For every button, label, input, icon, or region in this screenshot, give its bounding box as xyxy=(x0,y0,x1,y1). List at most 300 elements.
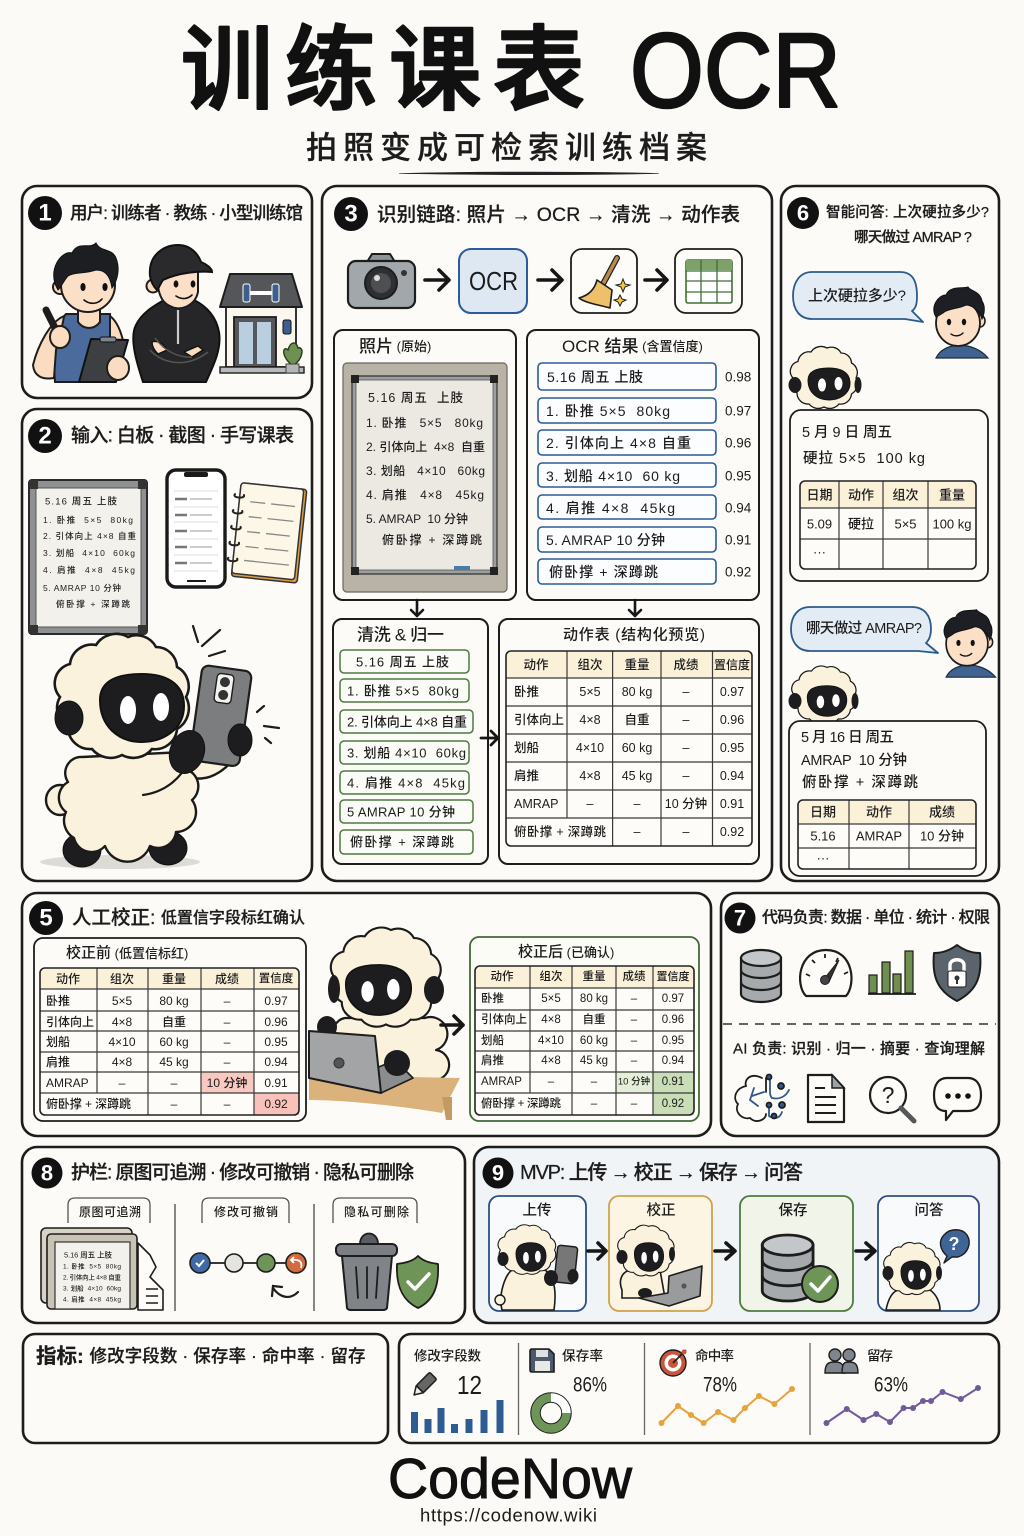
after table: 引体向上 xyxy=(481,1012,527,1026)
arrow xyxy=(715,1243,735,1259)
badge 7: 7 xyxy=(734,906,746,930)
speech bubble 1: 上次硬拉多少? xyxy=(808,286,906,304)
clean row text: 5 AMRAP 10 分钟 xyxy=(347,804,455,820)
before table: 4×8 xyxy=(112,1015,133,1029)
OCR results title: OCR 结果 (含置信度) xyxy=(562,336,703,356)
answer table 1: 重量 xyxy=(939,488,965,502)
before table: 0.94 xyxy=(264,1055,288,1069)
badge 3: 3 xyxy=(344,200,358,228)
after table: 卧推 xyxy=(481,991,504,1005)
dashed divider xyxy=(723,1023,996,1025)
heading 6: 智能问答: 上次硬拉多少? xyxy=(826,203,989,221)
after table: 4×10 xyxy=(538,1035,564,1047)
clean title: 清洗 & 归一 xyxy=(357,626,444,644)
after table: – xyxy=(548,1076,555,1088)
box: broom xyxy=(571,249,637,313)
OCR row text: 3. 划船 4×10 60 kg xyxy=(546,468,680,484)
after table: 5×5 xyxy=(541,993,561,1005)
AI heading: AI 负责: 识别 · 归一 · 摘要 · 查询理解 xyxy=(733,1040,985,1058)
answer table 1: 5.09 xyxy=(807,516,832,532)
after table: 俯卧撑 + 深蹲跳 xyxy=(481,1096,562,1110)
title: OCR xyxy=(630,12,841,130)
box: OCR xyxy=(459,249,527,313)
icon: gym xyxy=(220,274,304,373)
icon: camera xyxy=(348,254,415,308)
metric: retention: 留存 xyxy=(867,1348,893,1364)
action table: – xyxy=(683,685,690,699)
before table: – xyxy=(171,1097,178,1111)
metric: save rate: 保存率 xyxy=(562,1348,603,1364)
arrow down xyxy=(411,600,423,616)
icon: person 2 xyxy=(944,610,996,677)
metric: retention: 63% xyxy=(874,1374,908,1396)
clean row text: 5.16 周五 上肢 xyxy=(356,654,449,670)
before table: – xyxy=(224,994,231,1008)
icon: person 1 xyxy=(934,287,988,358)
whiteboard: 2. 引体向上 4×8 自重 xyxy=(43,531,136,541)
panel: 2 input xyxy=(22,409,312,881)
panel: before correction xyxy=(34,938,306,1121)
action table: 60 kg xyxy=(622,741,652,755)
answer table 1 xyxy=(800,481,976,569)
arrow down xyxy=(629,600,641,616)
whiteboard: 3. 划船 4×10 60kg xyxy=(43,548,135,558)
after table: 0.94 xyxy=(662,1055,685,1067)
clean row text: 4. 肩推 4×8 45kg xyxy=(347,776,465,790)
icon: green shield xyxy=(397,1256,438,1308)
action table: – xyxy=(634,825,641,839)
arrow xyxy=(588,1243,606,1259)
sheep with laptop xyxy=(309,928,460,1120)
whiteboard photo: 5. AMRAP 10 分钟 xyxy=(366,511,468,526)
sheep head 1 xyxy=(788,346,862,408)
footer logo: CodeNow xyxy=(388,1447,633,1511)
metric: fields edited: 修改字段数 xyxy=(414,1348,482,1364)
OCR rows xyxy=(538,363,716,584)
step: ask xyxy=(878,1196,979,1311)
action table: – xyxy=(634,797,641,811)
OCR confidence values: 0.95 xyxy=(725,468,751,484)
whiteboard photo: 4. 肩推 4×8 45kg xyxy=(366,487,484,502)
icon: stacked photos: 5.16 周五 上肢 xyxy=(64,1250,112,1260)
handwritten notebook xyxy=(226,482,307,583)
after table: – xyxy=(591,1076,598,1088)
before table: 划船 xyxy=(46,1034,70,1049)
after table: – xyxy=(631,1098,638,1110)
bar chart: edits xyxy=(411,1400,504,1433)
after table: 肩推 xyxy=(481,1053,504,1067)
metric: save rate xyxy=(530,1348,607,1428)
phone screenshot xyxy=(167,470,225,587)
icon: question search: ? xyxy=(882,1082,894,1108)
whiteboard: 1. 卧推 5×5 80kg xyxy=(43,515,133,525)
after table: – xyxy=(631,1035,638,1047)
icon: trash xyxy=(336,1234,397,1310)
answer table 2: 动作 xyxy=(866,804,892,820)
subtitle: 拍照变成可检索训练档案 xyxy=(306,130,707,166)
action table: 45 kg xyxy=(622,769,652,783)
after table: 0.91 xyxy=(662,1076,684,1088)
OCR row text: 2. 引体向上 4×8 自重 xyxy=(546,435,691,451)
tab: traceable: 原图可追溯 xyxy=(79,1204,141,1219)
tab: deletable: 隐私可删除 xyxy=(344,1204,409,1219)
action table: 0.95 xyxy=(720,741,744,755)
action table: 卧推 xyxy=(514,685,539,699)
OCR confidence values: 0.97 xyxy=(725,404,751,418)
speech bubble 2 xyxy=(791,607,938,653)
after table: – xyxy=(631,1055,638,1067)
after table: 4×8 xyxy=(541,1055,561,1067)
icon: stacked photos: 1. 卧推 5×5 80kg xyxy=(63,1262,121,1270)
icon: target xyxy=(660,1350,686,1376)
before table: 0.91 xyxy=(264,1076,288,1090)
after table: 10 分钟 xyxy=(618,1076,650,1088)
badge 9 xyxy=(482,1158,514,1188)
icon: stacked photos: 3. 划船 4×10 60kg xyxy=(63,1284,121,1292)
action table: 动作 xyxy=(523,658,549,672)
action table: 4×8 xyxy=(579,769,601,783)
answer box 2: 俯卧撑 + 深蹲跳 xyxy=(802,773,918,791)
before table: 0.92 xyxy=(264,1097,288,1111)
after table: 成绩 xyxy=(622,969,646,983)
panel: after correction xyxy=(470,937,699,1121)
action table: 4×10 xyxy=(576,741,604,755)
after table: 0.92 xyxy=(662,1098,684,1110)
answer table 1: 5×5 xyxy=(894,516,917,532)
heading 5: 人工校正: 低置信字段标红确认 xyxy=(72,907,305,929)
panel: 8 guardrails xyxy=(22,1147,465,1323)
badge 8 xyxy=(32,1158,62,1188)
answer box 2 xyxy=(789,721,986,876)
icon: question search xyxy=(870,1077,914,1121)
action table: 0.97 xyxy=(720,685,744,699)
clean row text: 1. 卧推 5×5 80kg xyxy=(347,684,459,698)
action table: 80 kg xyxy=(622,685,652,699)
action table: 肩推 xyxy=(514,768,539,783)
metrics heading text: 指标: 修改字段数 · 保存率 · 命中率 · 留存 xyxy=(36,1344,366,1368)
OCR confidence values: 0.92 xyxy=(725,564,751,580)
heading 7: 代码负责: 数据 · 单位 · 统计 · 权限 xyxy=(762,908,990,926)
sheep holding phone xyxy=(40,626,279,869)
arrow xyxy=(856,1243,875,1259)
before table: 卧推 xyxy=(46,994,70,1008)
clean row text: 2. 引体向上 4×8 自重 xyxy=(347,714,467,730)
icon: shield lock xyxy=(934,945,980,1001)
after table: – xyxy=(591,1098,598,1110)
OCR row text: 5.16 周五 上肢 xyxy=(547,369,643,385)
heading 2: 输入: 白板 · 截图 · 手写课表 xyxy=(71,424,294,446)
whiteboard: 5.16 周五 上肢 xyxy=(45,496,117,508)
action table: 0.91 xyxy=(720,797,744,811)
clean row text xyxy=(347,654,467,850)
icon: AI brain xyxy=(735,1074,789,1121)
badge 5: 5 xyxy=(39,904,53,932)
footer url: https://codenow.wiki xyxy=(420,1504,597,1526)
whiteboard: 4. 肩推 4×8 45kg xyxy=(43,565,135,575)
after table: 0.96 xyxy=(662,1014,684,1026)
before table: AMRAP xyxy=(46,1076,89,1090)
step: ask: ? xyxy=(948,1234,960,1254)
after table: 动作 xyxy=(490,970,514,983)
icon: trainee xyxy=(33,243,129,382)
whiteboard photo xyxy=(343,363,507,592)
action table: – xyxy=(683,713,690,727)
whiteboard photo: 5.16 周五 上肢 xyxy=(368,390,463,405)
speech bubble 1 xyxy=(793,272,923,322)
box: OCR: OCR xyxy=(469,266,518,296)
heading 6 xyxy=(826,203,989,246)
action table: – xyxy=(587,797,594,811)
action table: 俯卧撑 + 深蹲跳 xyxy=(514,824,606,839)
icon: stacked photos: 2. 引体向上 4×8 自重 xyxy=(63,1272,122,1282)
after table: 0.97 xyxy=(662,993,684,1005)
action table: 划船 xyxy=(514,740,540,755)
action table: 10 分钟 xyxy=(665,796,707,811)
icon: gauge xyxy=(800,950,851,996)
metric: save rate: 86% xyxy=(573,1374,607,1396)
after table: 置信度 xyxy=(656,969,690,983)
answer table 1: ··· xyxy=(813,544,826,560)
whiteboard xyxy=(29,480,147,634)
OCR row text: 俯卧撑 + 深蹲跳 xyxy=(549,564,658,580)
icon: stacked photos xyxy=(41,1228,163,1310)
sheep head 2 xyxy=(788,666,858,723)
icon: database xyxy=(741,950,781,1002)
metric: hit rate: 78% xyxy=(703,1374,737,1396)
arrow xyxy=(538,270,562,290)
action table: 重量 xyxy=(624,657,650,672)
before table: 组次 xyxy=(110,971,134,986)
badge 1 xyxy=(28,196,62,230)
after table: – xyxy=(631,1014,638,1026)
action table: – xyxy=(683,741,690,755)
before table: 俯卧撑 + 深蹲跳 xyxy=(46,1096,131,1111)
OCR confidence values: 0.98 xyxy=(725,370,751,384)
metric: fields edited: 12 xyxy=(457,1370,482,1400)
answer table 2 xyxy=(798,800,976,869)
action table: – xyxy=(683,769,690,783)
before table: 0.95 xyxy=(264,1035,288,1049)
subtitle underline xyxy=(399,172,659,175)
action table: 5×5 xyxy=(579,685,601,699)
before table: 重量 xyxy=(162,971,186,986)
step: correct xyxy=(609,1196,712,1311)
step: save: 保存 xyxy=(778,1202,808,1219)
badge 2: 2 xyxy=(38,422,52,450)
badge 7 xyxy=(724,902,756,934)
icon: pencil xyxy=(411,1372,437,1398)
badge 5 xyxy=(29,901,63,935)
answer table 1: 动作 xyxy=(848,488,874,502)
before table: – xyxy=(224,1035,231,1049)
arrow xyxy=(441,1016,463,1034)
icon: coach xyxy=(133,245,220,382)
badge 6: 6 xyxy=(797,200,809,226)
after table: AMRAP xyxy=(481,1076,522,1088)
action table xyxy=(506,651,752,846)
step: save xyxy=(740,1196,853,1311)
OCR confidence values: 0.96 xyxy=(725,436,751,450)
tab: traceable xyxy=(68,1198,150,1223)
heading 1: 用户: 训练者 · 教练 · 小型训练馆 xyxy=(70,203,303,223)
before table: 肩推 xyxy=(46,1054,70,1069)
metric: retention xyxy=(824,1348,981,1426)
after table: 组次 xyxy=(540,969,563,983)
after table: 划船 xyxy=(481,1033,504,1047)
before table: 置信度 xyxy=(259,971,294,985)
before table: 0.96 xyxy=(264,1015,288,1029)
after table: 0.95 xyxy=(662,1035,684,1047)
tab: deletable xyxy=(333,1198,417,1223)
answer box 1: 5 月 9 日 周五 xyxy=(802,425,892,441)
heading 3: 识别链路: 照片 → OCR → 清洗 → 动作表 xyxy=(377,204,740,226)
box: table icon xyxy=(675,249,742,313)
icon: chat xyxy=(934,1078,981,1120)
donut chart xyxy=(536,1398,566,1428)
after table xyxy=(475,966,694,1115)
before table: 0.97 xyxy=(264,994,288,1008)
panel: metrics xyxy=(399,1334,999,1443)
action table: AMRAP xyxy=(514,797,558,811)
action table: 置信度 xyxy=(714,657,750,672)
OCR confidence values: 0.94 xyxy=(725,500,752,516)
arrow xyxy=(645,270,667,290)
after table: 重量 xyxy=(582,969,606,983)
answer table 1: 100 kg xyxy=(932,516,972,532)
heading 8: 护栏: 原图可追溯 · 修改可撤销 · 隐私可删除 xyxy=(71,1162,414,1184)
whiteboard: 5. AMRAP 10 分钟 xyxy=(43,583,121,593)
before table xyxy=(40,968,299,1115)
clean row text: 俯卧撑 + 深蹲跳 xyxy=(350,834,454,850)
icon: floppy xyxy=(530,1349,554,1372)
step: correct: 校正 xyxy=(646,1202,676,1219)
before table: – xyxy=(224,1055,231,1069)
before table: 引体向上 xyxy=(46,1014,94,1029)
action table: 组次 xyxy=(577,657,603,672)
arrow xyxy=(425,270,449,290)
before title: 校正前 (低置信标红) xyxy=(66,944,188,962)
icon: undo timeline xyxy=(190,1253,306,1297)
action table: 0.92 xyxy=(720,825,744,839)
badge 9: 9 xyxy=(492,1160,504,1186)
answer table 2: 成绩 xyxy=(929,804,955,820)
answer box 1: 硬拉 5×5 100 kg xyxy=(803,449,925,467)
OCR row text: 1. 卧推 5×5 80kg xyxy=(546,403,670,419)
answer table 1: 组次 xyxy=(892,488,919,502)
action table title: 动作表 (结构化预览) xyxy=(563,626,705,644)
title xyxy=(181,12,841,130)
before table: 45 kg xyxy=(159,1055,189,1069)
panel: 7 responsibilities xyxy=(721,893,999,1136)
panel: 1 users xyxy=(22,186,312,398)
step: upload xyxy=(489,1196,586,1311)
action table: 引体向上 xyxy=(514,712,564,727)
tab: undoable: 修改可撤销 xyxy=(214,1204,278,1219)
action table: 0.94 xyxy=(720,769,744,783)
panel: 3 recognition chain xyxy=(322,186,772,881)
before table: 5×5 xyxy=(112,994,133,1008)
action table: 成绩 xyxy=(673,657,699,672)
icon: document xyxy=(808,1075,844,1122)
action table: – xyxy=(683,825,690,839)
OCR row text: 5. AMRAP 10 分钟 xyxy=(546,532,665,548)
OCR row text xyxy=(546,369,691,580)
metric: hit rate xyxy=(658,1348,795,1426)
tab: undoable xyxy=(202,1198,289,1223)
speech bubble 2: 哪天做过 AMRAP? xyxy=(806,620,922,637)
before table: 成绩 xyxy=(215,971,239,986)
action table: 0.96 xyxy=(720,713,744,727)
before table: 4×8 xyxy=(112,1055,133,1069)
before table: 80 kg xyxy=(159,994,189,1008)
answer table 1: 日期 xyxy=(806,488,833,502)
after table: 自重 xyxy=(582,1012,606,1026)
panel: action table xyxy=(499,619,759,864)
heading 9: MVP: 上传 → 校正 → 保存 → 问答 xyxy=(520,1161,803,1184)
after table: – xyxy=(631,993,638,1005)
answer box 2: 5 月 16 日 周五 xyxy=(801,730,894,746)
OCR row text: 4. 肩推 4×8 45kg xyxy=(546,500,675,516)
action table: 自重 xyxy=(624,712,650,727)
OCR confidence values: 0.91 xyxy=(725,532,751,548)
whiteboard: 俯卧撑 + 深蹲跳 xyxy=(56,599,130,609)
arrow xyxy=(481,731,498,745)
metric: hit rate: 命中率 xyxy=(695,1348,734,1364)
badge 6 xyxy=(787,197,819,229)
before table: 自重 xyxy=(162,1014,186,1029)
before table: – xyxy=(224,1015,231,1029)
before table: 60 kg xyxy=(159,1035,189,1049)
panel: OCR results xyxy=(527,330,759,600)
answer table 2: ··· xyxy=(816,850,830,866)
answer table 2: 日期 xyxy=(810,804,836,820)
line chart: retention xyxy=(824,1385,981,1426)
clean rows xyxy=(340,650,473,854)
before table: – xyxy=(171,1076,178,1090)
line chart: hit rate xyxy=(658,1386,795,1426)
before table: – xyxy=(224,1097,231,1111)
badge 8: 8 xyxy=(41,1160,53,1186)
panel: metrics heading xyxy=(23,1334,388,1443)
before table: 动作 xyxy=(56,972,80,986)
answer box 2: AMRAP 10 分钟 xyxy=(801,752,907,769)
panel: 9 MVP xyxy=(474,1147,999,1323)
answer table 2: 5.16 xyxy=(810,828,836,844)
action table: 4×8 xyxy=(579,713,601,727)
answer table 2: 10 分钟 xyxy=(920,828,964,844)
badge 3 xyxy=(334,197,368,231)
after table: 4×8 xyxy=(541,1014,561,1026)
whiteboard photo: 2. 引体向上 4×8 自重 xyxy=(366,439,485,454)
panel: photo original xyxy=(334,330,516,600)
answer table 2: AMRAP xyxy=(856,828,902,844)
step: ask: 问答 xyxy=(914,1202,944,1219)
OCR confidence values xyxy=(725,370,752,580)
panel: 6 smart Q&A xyxy=(781,186,999,881)
whiteboard photo: 3. 划船 4×10 60kg xyxy=(366,463,485,478)
before table: 4×10 xyxy=(108,1035,136,1049)
before table: – xyxy=(119,1076,126,1090)
icon: bar chart xyxy=(868,951,916,994)
icon: users xyxy=(825,1349,858,1373)
step: upload: 上传 xyxy=(522,1202,552,1219)
clean row text: 3. 划船 4×10 60kg xyxy=(347,746,466,760)
before table: 10 分钟 xyxy=(207,1075,247,1090)
answer box 1 xyxy=(790,410,988,581)
metric: fields edited xyxy=(411,1348,504,1433)
whiteboard photo: 俯卧撑 + 深蹲跳 xyxy=(382,532,482,547)
icon: stacked photos: 4. 肩推 4×8 45kg xyxy=(63,1294,121,1304)
